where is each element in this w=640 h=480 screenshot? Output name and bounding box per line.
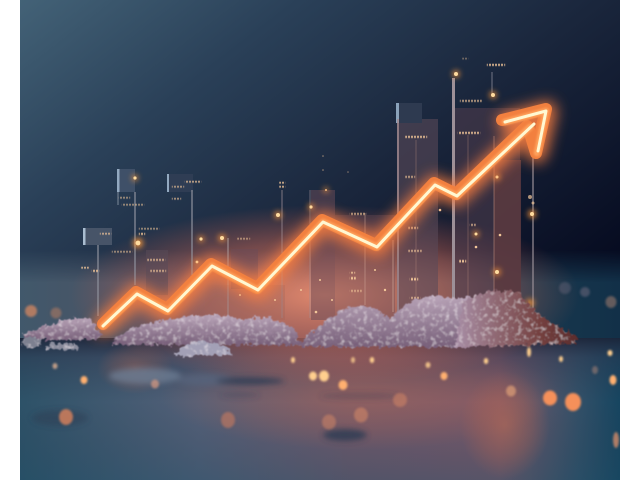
tower: tall centre-right [396, 103, 438, 319]
window light specks [81, 58, 505, 299]
city towers [83, 72, 533, 320]
mound: left [24, 318, 102, 340]
light halos [132, 70, 536, 307]
small snow clumps [22, 338, 232, 356]
mound: centre [298, 296, 480, 347]
tower: tallest right [452, 72, 521, 320]
floor warm reflection right [468, 380, 545, 472]
glowing city lights [132, 70, 536, 307]
arrow outer tube [103, 109, 546, 324]
floor warm reflection left [102, 346, 168, 390]
sign tower two [117, 169, 135, 285]
neon arrow chart line [103, 109, 547, 326]
floor shading [20, 338, 620, 480]
arrow support pole [532, 155, 534, 318]
floor bokeh lights [25, 282, 619, 448]
small bright bokeh [52, 347, 616, 390]
mound: centre-left [112, 315, 300, 345]
small towers centre [282, 190, 395, 320]
scattered light dots [239, 155, 534, 313]
wide arrow glow [103, 111, 547, 326]
floor warm wash centre [190, 353, 518, 440]
light cores [133, 72, 534, 274]
faint low blocks [146, 249, 285, 320]
warm glow behind chart [82, 208, 571, 378]
large bokeh [25, 282, 619, 448]
floor surface [20, 338, 620, 480]
mound: right red shade [455, 290, 576, 347]
frosted mound [24, 290, 576, 347]
sign tower one [83, 228, 112, 316]
arrow inner orange [103, 111, 546, 326]
sign tower three [167, 174, 228, 316]
blurred foreground clumps [32, 368, 400, 441]
distant floor band [20, 257, 620, 338]
background sky [20, 0, 620, 282]
arrow white core [103, 111, 546, 326]
